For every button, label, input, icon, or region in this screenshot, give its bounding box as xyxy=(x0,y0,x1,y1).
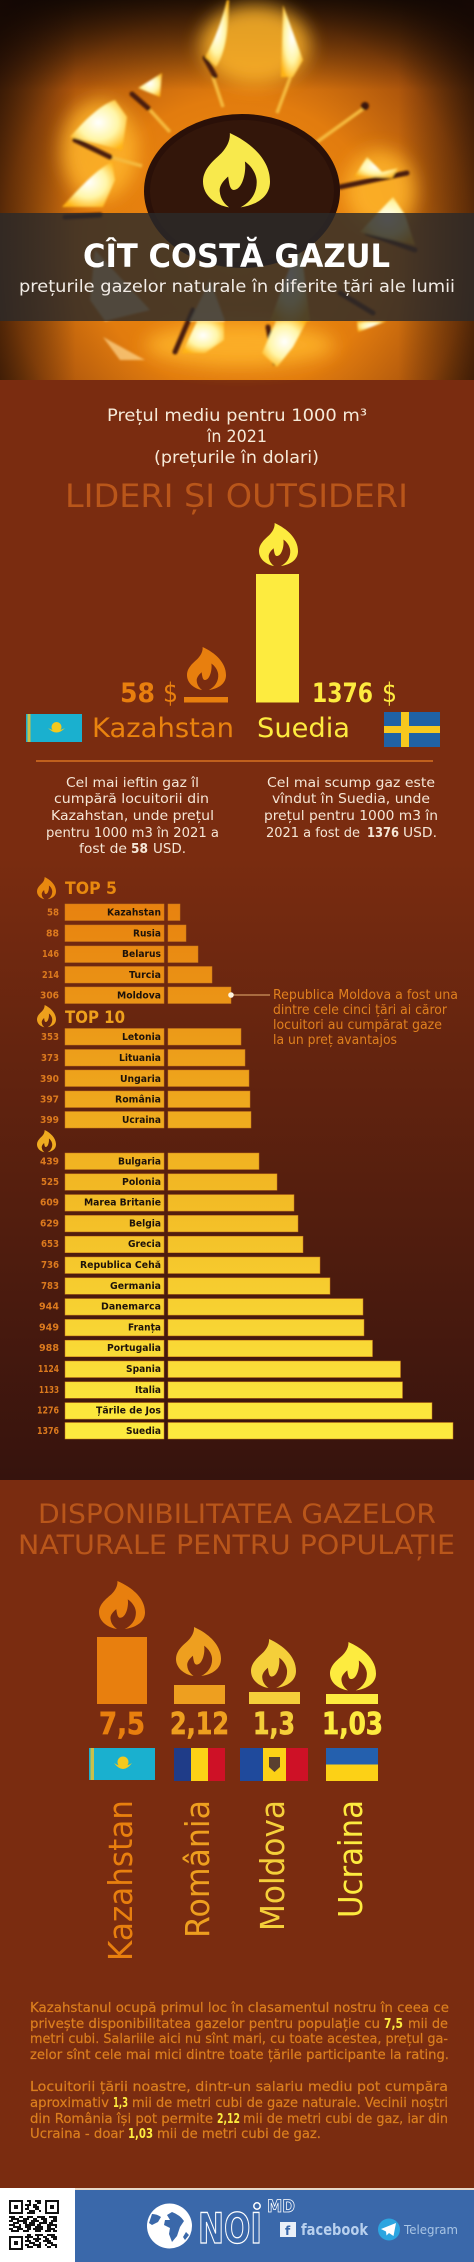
country labels: Grecia xyxy=(128,1239,161,1250)
bar chart: gas price per country xyxy=(37,877,453,1439)
price values: 1376 xyxy=(37,1426,59,1437)
price values: 1133 xyxy=(39,1385,59,1396)
text: cheapest gas: cumpără locuitorii din xyxy=(54,791,209,807)
value 58 $: 58 xyxy=(120,678,155,709)
name: Moldova xyxy=(253,1800,292,1931)
icon: flame xyxy=(251,1639,296,1688)
icon: facebook xyxy=(280,2222,296,2238)
icon: flame xyxy=(176,1627,221,1676)
callout: Moldova note: la un preț avantajos xyxy=(273,1032,397,1048)
country labels: Marea Britanie xyxy=(84,1198,161,1208)
label TOP 5: TOP 5 xyxy=(65,879,117,899)
country labels: Danemarca xyxy=(101,1302,161,1312)
country labels: Belarus xyxy=(122,949,161,960)
chart panel background xyxy=(0,855,474,1480)
icon: flame top 10 xyxy=(37,1005,56,1027)
price values: 1124 xyxy=(38,1364,59,1375)
country name Suedia: Suedia xyxy=(257,713,350,744)
text: Kazakhstan availability: privește disponibilitatea gazelor pentru populație cu xyxy=(30,2017,380,2032)
text: cheapest gas: 58 xyxy=(131,841,148,857)
column: Romania xyxy=(170,1627,229,1938)
price values: 373 xyxy=(41,1053,59,1064)
title: CÎT COSTĂ GAZUL xyxy=(83,237,390,275)
bar Sweden xyxy=(256,574,299,702)
name: România xyxy=(178,1800,217,1938)
text: Kazakhstan availability: Kazahstanul ocupă primul loc în clasamentul nostru în ceea ce xyxy=(30,2001,449,2016)
heading: leaders and outsiders: LIDERI ȘI OUTSIDERI xyxy=(65,477,408,515)
text: neighbours availability: mii de metri cubi de gaz. xyxy=(157,2127,321,2142)
price values: 353 xyxy=(41,1032,59,1043)
country labels: Germania xyxy=(110,1281,161,1292)
text: most expensive gas: Cel mai scump gaz este xyxy=(267,775,435,791)
logo: MD: MD xyxy=(267,2197,295,2217)
country labels: Franța xyxy=(128,1322,161,1334)
value: 7,5 xyxy=(99,1707,145,1742)
country labels: Belgia xyxy=(129,1218,161,1230)
price values: 399 xyxy=(40,1115,59,1126)
text: Kazakhstan availability xyxy=(30,2001,449,2063)
value 58 $: $ xyxy=(163,678,178,709)
icon: flame Kazakhstan xyxy=(187,647,226,690)
country labels: Moldova xyxy=(117,990,161,1002)
price values: 146 xyxy=(42,949,59,960)
text: cheapest gas: pentru 1000 m3 în 2021 a xyxy=(46,825,219,841)
column: Kazakhstan xyxy=(89,1581,155,1961)
logo: dot xyxy=(254,2203,260,2209)
bar xyxy=(97,1637,147,1704)
bar xyxy=(326,1694,378,1704)
country labels: Lituania xyxy=(119,1053,161,1064)
price values: 397 xyxy=(40,1094,59,1106)
name: Ucraina xyxy=(331,1800,370,1918)
country labels: Bulgaria xyxy=(118,1156,161,1168)
price values: 653 xyxy=(41,1239,59,1250)
text: neighbours availability: Locuitorii țării noastre, dintr-un salariu mediu pot cumpăra xyxy=(30,2080,448,2095)
price values: 58 xyxy=(47,908,59,918)
flag: Kazakhstan xyxy=(26,714,82,742)
price values: 439 xyxy=(40,1156,59,1168)
column: Ukraine xyxy=(322,1642,383,1918)
value: 2,12 xyxy=(170,1707,229,1742)
flag: Kazakhstan xyxy=(89,1748,155,1780)
callout: Moldova note xyxy=(228,987,458,1048)
intro text: average price xyxy=(107,406,367,468)
intro text: average price: Prețul mediu pentru 1000 m³ xyxy=(107,406,367,426)
flag: Moldova xyxy=(240,1748,308,1781)
facebook label: facebook xyxy=(301,2220,368,2239)
country labels: Ucraina xyxy=(122,1115,161,1126)
heading: availability of natural gas: NATURALE PENTRU POPULAȚIE xyxy=(18,1530,455,1561)
price values: 88 xyxy=(46,928,59,940)
comparison: Sweden high price xyxy=(256,523,440,747)
flag: Romania xyxy=(174,1748,225,1781)
callout: Moldova note: dintre cele cinci țări ai căror xyxy=(273,1002,447,1018)
telegram label: Telegram xyxy=(403,2223,458,2237)
label TOP 10: TOP 10 xyxy=(65,1008,125,1028)
callout: Moldova note: locuitori au cumpărat gaze xyxy=(273,1017,442,1033)
QR code xyxy=(9,2201,58,2249)
country labels: Suedia xyxy=(126,1426,161,1437)
heading: availability of natural gas: DISPONIBILITATEA GAZELOR xyxy=(38,1499,436,1530)
country labels: Rusia xyxy=(133,928,161,940)
bar Kazakhstan xyxy=(184,697,228,702)
icon: flame xyxy=(99,1581,145,1629)
country labels xyxy=(80,908,161,1437)
intro text: average price: în 2021 xyxy=(206,427,267,447)
icon: facebook: f xyxy=(285,2224,291,2238)
country labels: Turcia xyxy=(129,970,161,981)
text: Kazakhstan availability: zelor sînt cele mai mici dintre toate țările participante la rating. xyxy=(30,2048,449,2063)
price values: 390 xyxy=(40,1074,59,1085)
text: neighbours availability: 1,3 xyxy=(113,2096,128,2111)
hero photo: burning matches around a gas burner xyxy=(0,0,474,380)
column: Moldova xyxy=(240,1639,308,1931)
intro text: average price: (prețurile în dolari) xyxy=(154,448,319,468)
text: neighbours availability: 1,03 xyxy=(128,2127,153,2142)
heading: availability of natural gas xyxy=(18,1499,455,1561)
burner disc xyxy=(144,114,340,268)
price values: 988 xyxy=(39,1343,59,1354)
country labels: Portugalia xyxy=(107,1343,161,1354)
text: most expensive gas: vîndut în Suedia, unde xyxy=(272,791,430,807)
text: neighbours availability: mii de metri cubi de gaz, iar din xyxy=(243,2112,448,2127)
price values: 306 xyxy=(40,990,59,1002)
text: most expensive gas: prețul pentru 1000 m3 în xyxy=(264,808,438,824)
callout: Moldova note: Republica Moldova a fost una xyxy=(273,987,458,1003)
text: cheapest gas: Cel mai ieftin gaz îl xyxy=(66,775,199,791)
text: Kazakhstan availability: metri cubi. Salariile aici nu sînt mari, cu toate acestea, prețul ga- xyxy=(30,2032,448,2047)
icon: flame xyxy=(330,1642,376,1690)
text: cheapest gas: USD. xyxy=(153,841,186,857)
price values: 629 xyxy=(40,1218,59,1230)
price values: 949 xyxy=(39,1322,59,1334)
subtitle: prețurile gazelor naturale în diferite țări ale lumii xyxy=(19,277,455,297)
text: cheapest gas xyxy=(46,775,219,857)
country labels: Kazahstan xyxy=(107,908,161,918)
value: 1,3 xyxy=(253,1707,295,1742)
icon: flame Sweden xyxy=(259,523,298,566)
footer xyxy=(0,2188,474,2262)
text: Kazakhstan availability: mii de xyxy=(408,2017,448,2032)
text: Kazakhstan availability: 7,5 xyxy=(384,2017,403,2032)
icon: yellow flame xyxy=(203,133,270,207)
text: neighbours availability: Ucraina - doar xyxy=(30,2127,125,2142)
country labels: Spania xyxy=(126,1364,161,1375)
country labels: Țările de Jos xyxy=(96,1406,161,1416)
country name Kazahstan: Kazahstan xyxy=(92,713,234,744)
text: neighbours availability: din România își pot permite xyxy=(30,2112,213,2127)
price values: 944 xyxy=(39,1302,59,1312)
dark title band xyxy=(0,213,474,321)
text: cheapest gas: fost de xyxy=(79,841,127,857)
price values: 736 xyxy=(41,1260,59,1271)
text: most expensive gas: 2021 a fost de xyxy=(266,825,360,841)
icon: flame top 5 xyxy=(37,877,56,899)
section background: availability xyxy=(0,1480,474,2190)
text: neighbours availability: mii de metri cubi de gaze naturale. Vecinii noștri xyxy=(132,2096,448,2111)
price values: 1276 xyxy=(37,1406,59,1416)
value 1376 $: 1376 xyxy=(312,678,373,709)
price values xyxy=(37,908,59,1437)
icon: telegram xyxy=(378,2218,400,2240)
text: neighbours availability: aproximativ xyxy=(30,2096,109,2111)
text: most expensive gas: USD. xyxy=(403,825,437,841)
country labels: Republica Cehă xyxy=(80,1260,161,1271)
flag: Ukraine xyxy=(326,1748,378,1781)
country labels: Ungaria xyxy=(120,1074,161,1085)
bar xyxy=(249,1692,300,1704)
icon: flame rest xyxy=(37,1130,56,1152)
price values: 525 xyxy=(41,1177,59,1188)
text: most expensive gas: 1376 xyxy=(367,825,399,841)
name: Kazahstan xyxy=(101,1800,140,1961)
value 1376 $: $ xyxy=(382,678,397,709)
text: neighbours availability: 2,12 xyxy=(217,2112,240,2127)
country labels: Letonia xyxy=(122,1032,161,1043)
text: most expensive gas xyxy=(264,775,438,841)
text: neighbours availability xyxy=(30,2080,448,2142)
country labels: România xyxy=(115,1094,161,1106)
text: cheapest gas: Kazahstan, unde prețul xyxy=(51,808,214,824)
value: 1,03 xyxy=(322,1707,383,1742)
label and value bars xyxy=(65,904,453,1439)
country labels: Polonia xyxy=(122,1177,161,1188)
logo: globe xyxy=(147,2204,192,2248)
logo: NOI wordmark: NOI xyxy=(198,2204,262,2253)
flag: Sweden xyxy=(384,712,440,747)
bar xyxy=(174,1685,225,1704)
value 58 $ xyxy=(120,678,178,709)
price values: 783 xyxy=(41,1281,59,1292)
price values: 214 xyxy=(42,970,59,981)
comparison: Kazakhstan low price xyxy=(26,647,234,744)
price values: 609 xyxy=(40,1198,59,1208)
country labels: Italia xyxy=(135,1385,161,1396)
